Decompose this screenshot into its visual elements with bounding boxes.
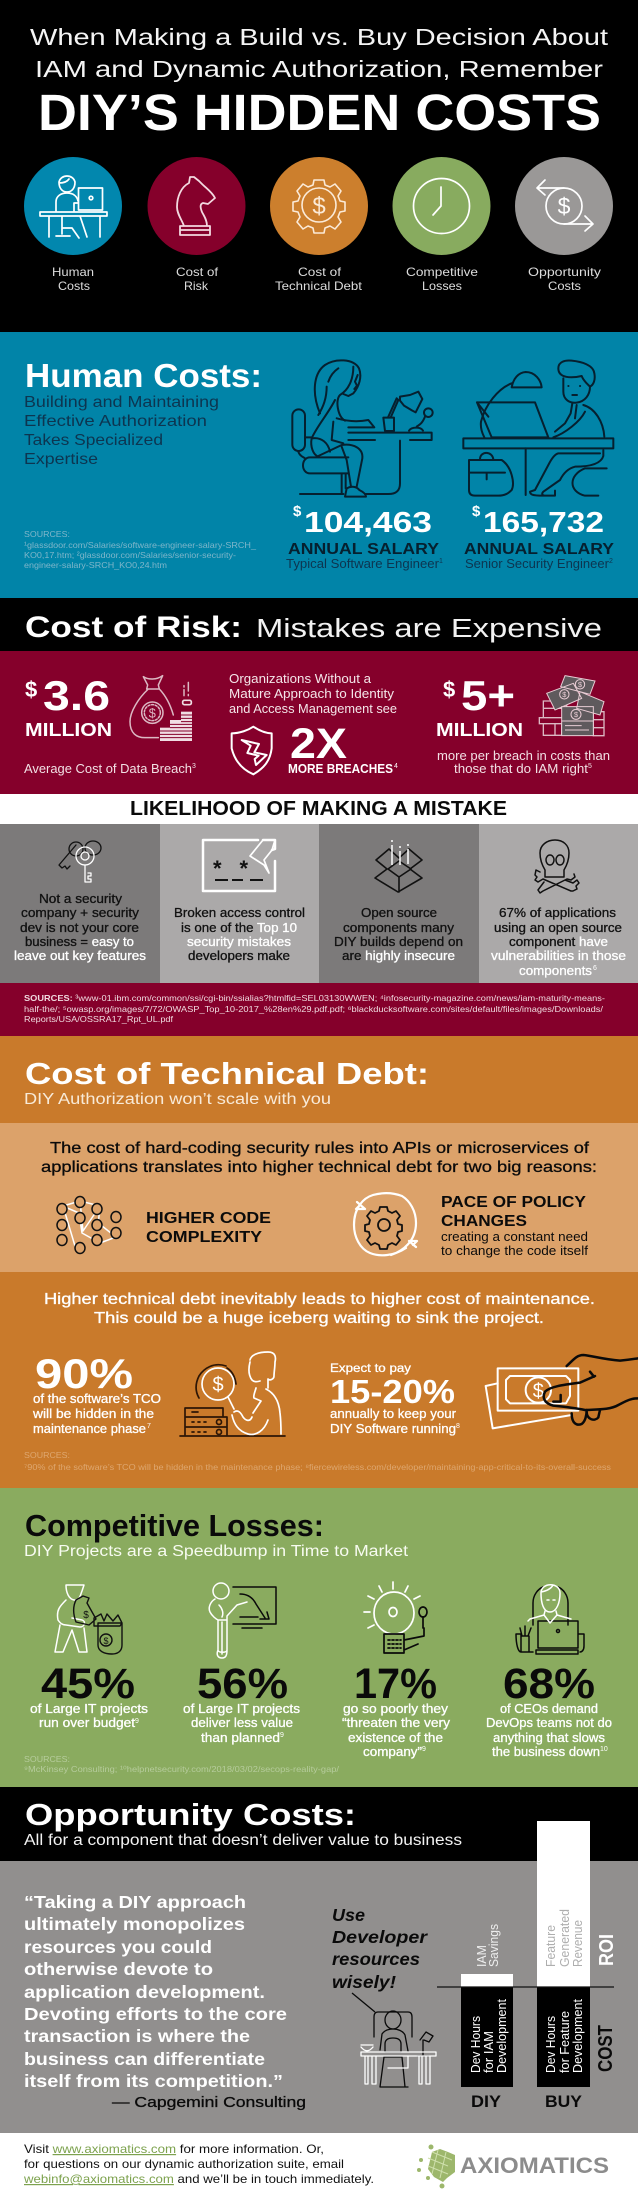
circle labels: Cost of	[176, 265, 219, 279]
stat: typical software engineer salary: Typical Software Engineer	[286, 557, 439, 571]
stat: typical software engineer salary: $	[293, 503, 302, 520]
stat: 56 percent: of Large IT projects	[183, 1702, 300, 1716]
arrow: callout pointer	[352, 1993, 375, 2012]
callout: use developer resources wisely: wisely!	[332, 1972, 396, 1992]
circle labels: Competitive	[406, 265, 478, 279]
human costs subheading: Effective Authorization	[24, 413, 207, 430]
quote: business can differentiate	[24, 2049, 265, 2069]
stat: 45 percent: 9	[135, 1718, 139, 1725]
icon: cash stack: $	[574, 710, 578, 719]
feature revenue label	[543, 1909, 585, 1967]
stat: 56 percent: deliver less value	[191, 1716, 293, 1730]
icon: man with money bags: $	[83, 1610, 89, 1621]
text: open source components: are highly insecure	[342, 949, 455, 963]
stat: 15-20 percent annually: 8	[456, 1423, 460, 1430]
panel: cost of technical debt	[0, 1036, 638, 1488]
icon: money bag and coins: $	[149, 706, 156, 720]
human costs subheading: Takes Specialized	[24, 432, 163, 449]
stat: 45 percent: of Large IT projects	[30, 1702, 148, 1716]
icon: technical debt circle: $	[312, 193, 326, 220]
stat: senior security engineer salary	[464, 503, 614, 571]
dev hours for feature label: Dev Hours	[543, 2016, 558, 2073]
panel: broken access control	[160, 824, 319, 983]
heading: opportunity costs: Opportunity Costs:	[25, 1797, 356, 1832]
stat: 90 percent of TCO: maintenance phase	[33, 1422, 146, 1436]
text: two big reasons intro	[41, 1140, 597, 1176]
text: iceberg warning	[44, 1291, 595, 1327]
stat: 3.6 million	[24, 672, 196, 776]
title intro: IAM and Dynamic Authorization, Remember	[35, 56, 603, 82]
callout: mature approach: Organizations Without a	[229, 672, 371, 686]
panel: opportunity costs banner	[0, 1787, 638, 1861]
text: pace of policy changes: to change the code itself	[441, 1244, 589, 1258]
circle labels	[52, 265, 601, 293]
stat: 2x more breaches	[288, 720, 398, 776]
circle labels: Technical Debt	[275, 279, 363, 293]
text: open source vulnerabilities: component have	[509, 935, 608, 949]
stat: 5+ million: more per breach in costs than	[437, 749, 610, 763]
text: open source vulnerabilities: 67% of applications	[499, 906, 616, 920]
callout: mature approach	[229, 672, 397, 716]
dev hours for IAM label: Dev Hours	[468, 2016, 483, 2073]
panel: cost of risk banner	[0, 598, 638, 651]
panel: open source components	[319, 824, 479, 983]
icon: human costs circle	[24, 157, 122, 255]
text: open source vulnerabilities: using an open source	[494, 921, 622, 935]
subheading: won't scale: DIY Authorization won’t scale with you	[24, 1091, 331, 1108]
text: iceberg warning: Higher technical debt inevitably leads to higher cost of maintenance.	[44, 1291, 595, 1308]
callout: mature approach: and Access Management see	[229, 702, 397, 716]
heading: competitive losses: Competitive Losses:	[25, 1508, 324, 1543]
stat: 90 percent of TCO: 7	[147, 1423, 151, 1430]
human costs sources: KO0,17.htm; ²glassdoor.com/Salaries/senior-security-	[24, 550, 236, 560]
icon: skull and crossbones	[535, 840, 579, 893]
stat: typical software engineer salary: 1	[439, 558, 443, 565]
icon: developer at desk from behind	[361, 2011, 436, 2087]
callout: use developer resources wisely: Developer	[332, 1927, 428, 1947]
icon: security engineer man at desk	[463, 361, 613, 496]
text: not a security company: business = easy to	[25, 935, 134, 949]
quote: transaction is where the	[24, 2026, 250, 2046]
stat: 3.6 million: $	[25, 677, 37, 702]
panel: two big reasons	[0, 1123, 638, 1272]
human costs subheading: Expertise	[24, 451, 98, 468]
stat: 90 percent of TCO	[32, 1350, 161, 1436]
stat: 56 percent: 9	[280, 1732, 284, 1739]
callout: use developer resources wisely	[332, 1905, 428, 1992]
callout: use developer resources wisely: resources	[332, 1949, 420, 1969]
text: technical debt sources: SOURCES:	[24, 1450, 70, 1460]
dev hours for IAM label: for IAM	[481, 2031, 496, 2073]
stat: 17 percent: go so poorly they	[343, 1702, 449, 1716]
text: higher code complexity: COMPLEXITY	[146, 1229, 263, 1246]
text: open source components: DIY builds depend on	[334, 935, 463, 949]
text: pace of policy changes: PACE OF POLICY	[441, 1194, 587, 1211]
circle labels: Human	[52, 265, 94, 279]
panel: footer	[0, 2133, 638, 2194]
icon: man with money bags	[55, 1585, 122, 1654]
stat: 17 percent	[342, 1660, 451, 1759]
callout: mature approach: Mature Approach to Identity	[229, 687, 395, 701]
bar label BUY: BUY	[545, 2092, 583, 2111]
text: technical debt sources	[24, 1450, 611, 1472]
IAM savings label: IAM	[474, 1945, 489, 1967]
title: DIY’S HIDDEN COSTS	[38, 84, 601, 141]
logo: axiomatics	[417, 2144, 609, 2188]
stat: 17 percent: 17%	[354, 1660, 437, 1708]
text: higher code complexity	[146, 1210, 271, 1246]
footer contact text: Visit www.axiomatics.com for more information. Or,	[24, 2142, 324, 2156]
stat: 17 percent: “threaten the very	[342, 1716, 451, 1730]
icon: presenter with falling chart	[209, 1583, 276, 1658]
stat: 90 percent of TCO: of the software’s TCO	[33, 1392, 161, 1406]
stat: 5+ million	[436, 672, 610, 776]
callout: use developer resources wisely: Use	[332, 1905, 365, 1925]
text: open source vulnerabilities: 6	[593, 965, 597, 972]
stat: 3.6 million: 3	[192, 763, 196, 770]
stat: 17 percent: existence of the	[348, 1731, 443, 1745]
quote: “Taking a DIY approach	[24, 1892, 246, 1912]
bar label DIY: DIY	[471, 2092, 502, 2111]
stat: 3.6 million: 3.6	[43, 672, 110, 719]
stat: 68 percent: of CEOs demand	[500, 1702, 598, 1716]
stat: 5+ million: those that do IAM right	[454, 762, 589, 776]
stat: senior security engineer salary: ANNUAL SALARY	[464, 541, 614, 558]
axis label ROI: ROI	[596, 1934, 618, 1966]
text: two big reasons intro: The cost of hard-coding security rules into APIs or microservices of	[50, 1140, 590, 1157]
footer contact text	[23, 2142, 374, 2186]
quote	[24, 1892, 287, 2091]
quote attribution: — Capgemini Consulting	[112, 2094, 306, 2111]
text: open source vulnerabilities: vulnerabilities in those	[491, 949, 626, 963]
text: risk sources	[24, 993, 605, 1024]
circle labels: Risk	[184, 279, 209, 293]
axis label COST: COST	[595, 2025, 617, 2072]
panel: risk sources	[0, 983, 638, 1036]
footer contact text: webinfo@axiomatics.com and we’ll be in touch immediately.	[23, 2172, 374, 2186]
icon: cash stack: $	[578, 680, 582, 689]
text: not a security company: company + security	[21, 906, 140, 920]
text: broken access control: security mistakes	[187, 935, 291, 949]
stat: 68 percent: 10	[600, 1746, 608, 1753]
stat: 45 percent: run over budget	[39, 1716, 136, 1730]
stat: 56 percent: than planned	[201, 1731, 280, 1745]
text: broken access control: developers make	[188, 949, 290, 963]
text: technical debt sources: ⁷90% of the software’s TCO will be hidden in the maintenance phase; ⁸fiercewireless.com/developer/maintaining-app-critical-to-its-overall-success	[24, 1462, 611, 1472]
human costs sources: ¹glassdoor.com/Salaries/software-engineer-salary-SRCH_	[24, 540, 256, 550]
stat: 3.6 million: Average Cost of Data Breach	[24, 762, 192, 776]
heading: human costs: Human Costs:	[25, 357, 262, 394]
icon: technical debt circle	[270, 157, 368, 255]
panel: risk statistics	[0, 651, 638, 794]
panel: opportunity costs body	[0, 1821, 638, 2133]
text: risk sources: half-the/; ⁵owasp.org/images/7/72/OWASP_Top_10-2017_%28en%29.pdf.pdf; ⁶blackducksoftware.com/sites/default/files/images/Downloads/	[24, 1004, 604, 1014]
icon: cash stack	[539, 676, 604, 736]
icon: competitive losses circle	[392, 157, 490, 255]
icon: cracked shield	[232, 727, 272, 774]
subheading: speedbump: DIY Projects are a Speedbump in Time to Market	[24, 1543, 409, 1560]
text: broken access control: is one of the Top 10	[181, 921, 297, 935]
footer contact text: for questions on our dynamic authorization suite, email	[24, 2157, 344, 2171]
stat: typical software engineer salary	[286, 503, 443, 571]
dev hours for feature label: Development	[570, 1999, 585, 2073]
panel: competitive losses	[0, 1488, 638, 1787]
stat: senior security engineer salary: $	[472, 503, 481, 520]
title intro	[30, 24, 609, 82]
text: competitive sources: ⁹McKinsey Consulting; ¹⁰helpnetsecurity.com/2018/03/02/secops-reality-gap/	[24, 1764, 340, 1774]
panel: open source vulnerabilities	[479, 824, 638, 983]
stat: senior security engineer salary: Senior Security Engineer	[465, 557, 609, 571]
IAM savings label: Savings	[486, 1924, 501, 1967]
text: broken access control: Broken access control	[174, 906, 305, 920]
human costs subheading	[24, 394, 219, 468]
text: iceberg warning: This could be a huge iceberg waiting to sink the project.	[94, 1310, 544, 1327]
panel: header	[0, 0, 638, 332]
IAM savings label	[474, 1924, 501, 1967]
panel: human costs	[0, 332, 638, 598]
logo: axiomatics: AXIOMATICS	[460, 2153, 609, 2178]
quote: resources you could	[24, 1937, 212, 1957]
text: open source components: Open source	[361, 906, 437, 920]
panel: not a security company	[0, 824, 160, 983]
stat: 68 percent	[486, 1660, 612, 1759]
icon: keys	[59, 841, 101, 882]
stat: 45 percent: 45%	[41, 1660, 135, 1708]
chart: DIY vs buy	[437, 1821, 618, 2111]
quote: ultimately monopolizes	[24, 1914, 245, 1934]
icon: hand holding cash: $	[533, 1380, 544, 1402]
circle labels: Costs	[548, 279, 581, 293]
human costs sources	[24, 529, 256, 570]
human costs subheading: Building and Maintaining	[24, 394, 219, 411]
stat: 68 percent: the business down	[492, 1745, 600, 1759]
text: higher code complexity: HIGHER CODE	[146, 1210, 271, 1227]
text: open source components: components many	[343, 921, 455, 935]
quote: Devoting efforts to the core	[24, 2004, 287, 2024]
text: pace of policy changes	[441, 1194, 589, 1258]
icon: analyst with magnifier and servers	[180, 1352, 285, 1436]
stat: 90 percent of TCO: 90%	[35, 1350, 133, 1397]
text: open source vulnerabilities: components	[519, 964, 592, 978]
subheading: mistakes are expensive: Mistakes are Expensive	[256, 615, 602, 643]
feature revenue label: Feature	[543, 1925, 558, 1967]
quote: application development.	[24, 1982, 265, 2002]
dev hours for IAM label	[468, 1999, 509, 2073]
stat: 17 percent: 9	[422, 1746, 426, 1753]
heading: cost of risk: Cost of Risk:	[25, 611, 242, 644]
stat: 68 percent: 68%	[503, 1660, 595, 1708]
icon: analyst with magnifier and servers: $	[212, 1374, 224, 1396]
stat: 5+ million: MILLION	[436, 719, 523, 740]
stat: 15-20 percent annually	[330, 1361, 460, 1436]
stat: typical software engineer salary: 104,463	[304, 507, 432, 539]
text: pace of policy changes: CHANGES	[441, 1213, 527, 1230]
text: competitive sources: SOURCES:	[24, 1754, 70, 1764]
circle labels: Opportunity	[528, 265, 601, 279]
stat: 5+ million: 5	[588, 763, 592, 770]
icon: cost of risk circle	[148, 157, 246, 255]
text: not a security company: leave out key features	[14, 949, 146, 963]
subheading: no business value: All for a component that doesn’t deliver value to business	[24, 1832, 462, 1849]
circle labels: Cost of	[298, 265, 342, 279]
stat: 56 percent	[183, 1660, 300, 1745]
text: not a security company: Not a security	[39, 892, 123, 906]
feature revenue label: Generated	[557, 1909, 572, 1967]
panel: likelihood heading	[0, 794, 638, 824]
text: risk sources: SOURCES: ³www-01.ibm.com/common/ssi/cgi-bin/ssialias?htmlfid=SEL03130WWEN; ⁴infosecurity-magazine.com/news/iam-maturity-means-	[24, 993, 605, 1003]
stat: 5+ million: 5+	[461, 672, 515, 719]
text: not a security company: dev is not your core	[20, 921, 139, 935]
icon: cash stack: $	[562, 690, 566, 699]
human costs sources: SOURCES:	[24, 529, 70, 539]
stat: 90 percent of TCO: will be hidden in the	[32, 1407, 154, 1421]
dev hours for feature label	[543, 1999, 585, 2073]
stat: 68 percent: DevOps teams not do	[486, 1716, 612, 1730]
stat: typical software engineer salary: ANNUAL SALARY	[288, 541, 439, 558]
stat: senior security engineer salary: 2	[609, 558, 613, 565]
icon: code complexity network	[57, 1196, 121, 1254]
stat: 2x more breaches: 4	[394, 763, 398, 770]
icon: money bag and coins	[130, 676, 192, 741]
icon: software engineer woman at desk	[292, 360, 433, 497]
icon: CEO at laptop	[516, 1585, 584, 1654]
title intro: When Making a Build vs. Buy Decision About	[30, 24, 609, 50]
stat: 2x more breaches: MORE BREACHES	[288, 762, 393, 776]
text: broken access control	[174, 906, 305, 963]
text: two big reasons intro: applications translates into higher technical debt for two big reasons:	[41, 1159, 597, 1176]
stat: 56 percent: 56%	[197, 1660, 288, 1708]
stat: 15-20 percent annually: Expect to pay	[330, 1361, 411, 1375]
stat: 15-20 percent annually: annually to keep your	[330, 1407, 456, 1421]
icon: open box	[375, 840, 422, 892]
stat: 15-20 percent annually: 15-20%	[330, 1373, 455, 1410]
feature revenue label: Revenue	[570, 1920, 585, 1967]
icon: hand holding cash	[486, 1355, 638, 1428]
stat: 5+ million: $	[443, 677, 455, 702]
heading: likelihood of making a mistake: LIKELIHOOD OF MAKING A MISTAKE	[130, 798, 507, 820]
text: open source components	[334, 906, 463, 963]
stat: 3.6 million: MILLION	[25, 719, 112, 740]
dev hours for feature label: for Feature	[557, 2011, 572, 2073]
circle labels: Costs	[58, 279, 90, 293]
icon: gear with cycle arrows	[354, 1193, 417, 1255]
quote: otherwise devote to	[24, 1959, 213, 1979]
icon: alarm bell	[364, 1582, 427, 1653]
circle labels: Losses	[422, 279, 462, 293]
text: open source vulnerabilities	[491, 906, 626, 978]
icon: broken password box	[203, 840, 275, 891]
icon: opportunity costs circle: $	[558, 193, 571, 219]
text: not a security company	[14, 892, 146, 963]
text: pace of policy changes: creating a constant need	[441, 1230, 588, 1244]
text: risk sources: Reports/USA/OSSRA17_Rpt_UL.pdf	[24, 1014, 174, 1024]
stat: 68 percent: anything that slows	[493, 1731, 605, 1745]
stat: 15-20 percent annually: DIY Software running	[330, 1422, 456, 1436]
heading: cost of technical debt: Cost of Technical Debt:	[25, 1056, 429, 1091]
human costs sources: engineer-salary-SRCH_KO0,24.htm	[24, 560, 167, 570]
stat: 45 percent	[30, 1660, 148, 1730]
text: competitive sources	[24, 1754, 340, 1774]
icon: broken password box: **	[213, 856, 248, 881]
icon: opportunity costs circle	[515, 157, 613, 255]
icon: man with money bags: $	[103, 1636, 109, 1646]
stat: 17 percent: company”	[363, 1745, 422, 1759]
dev hours for IAM label: Development	[494, 1999, 509, 2073]
stat: senior security engineer salary: 165,732	[483, 507, 604, 539]
stat: 2x more breaches: 2X	[290, 720, 347, 768]
quote: itself from its competition.”	[24, 2071, 283, 2091]
